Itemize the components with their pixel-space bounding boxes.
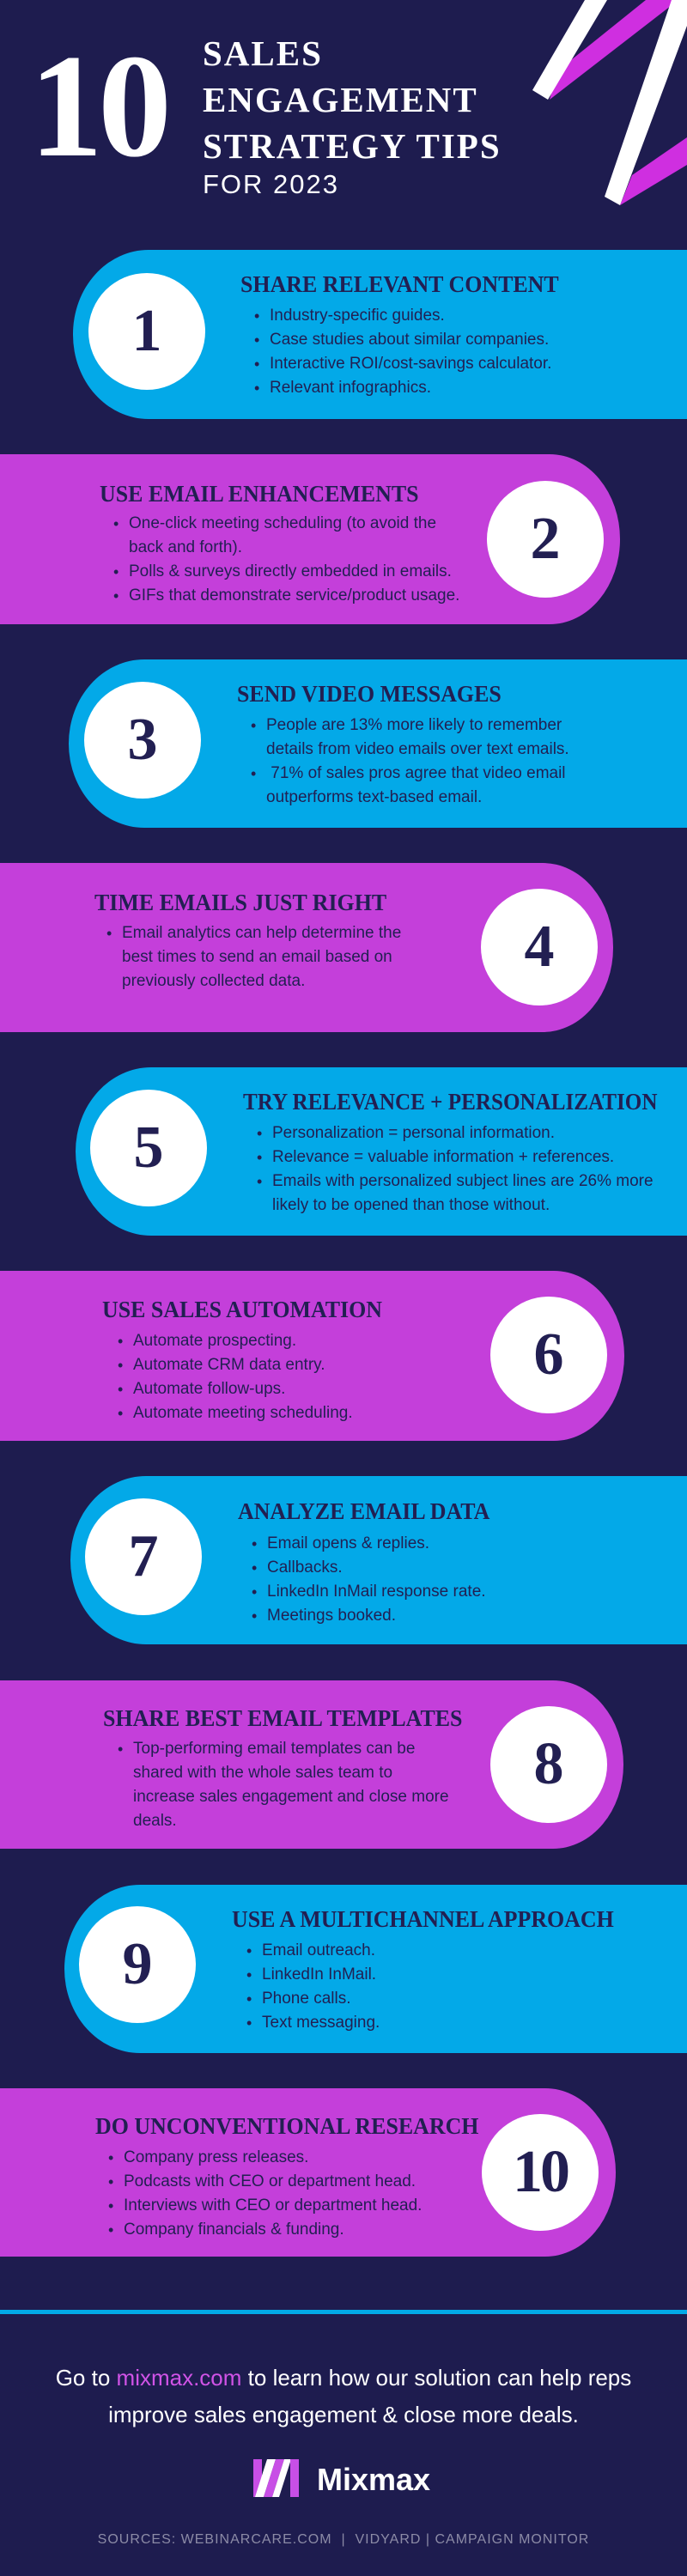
bullets 9: Text messaging. — [262, 2014, 380, 2032]
bullets 3: outperforms text-based email. — [266, 788, 482, 806]
footer call to action: Go to mixmax.com to learn how our solution can help reps — [56, 2365, 631, 2391]
title 8: SHARE BEST EMAIL TEMPLATES — [103, 1705, 462, 1731]
title 7: ANALYZE EMAIL DATA — [238, 1498, 489, 1524]
number circle 9 — [79, 1906, 196, 2023]
title 4: TIME EMAILS JUST RIGHT — [94, 890, 386, 915]
bullets 6: Automate prospecting. — [133, 1332, 296, 1350]
bullets 1: Case studies about similar companies. — [270, 331, 549, 349]
bullets 3: People are 13% more likely to remember — [266, 716, 562, 734]
header: title: ENGAGEMENT — [203, 80, 478, 119]
bullets 8 — [119, 1740, 449, 1830]
number circle 7: 7 — [129, 1523, 158, 1589]
header: big number 10: 10 — [29, 25, 167, 188]
bullets 10: Podcasts with CEO or department head. — [124, 2172, 416, 2190]
bullets 10: Company press releases. — [124, 2148, 308, 2166]
bullets 1: Relevant infographics. — [270, 379, 431, 397]
header: title — [203, 33, 502, 199]
bullets 8: increase sales engagement and close more — [133, 1788, 449, 1806]
number circle 2 — [487, 481, 604, 598]
title 3: SEND VIDEO MESSAGES — [237, 681, 502, 707]
bullets 2: Polls & surveys directly embedded in emails. — [129, 562, 452, 580]
bullets 2: One-click meeting scheduling (to avoid the — [129, 514, 436, 532]
bullets 6: Automate CRM data entry. — [133, 1356, 325, 1374]
header: title: STRATEGY TIPS — [203, 126, 502, 166]
title 2: USE EMAIL ENHANCEMENTS — [100, 481, 419, 507]
number circle 3 — [84, 682, 201, 799]
bullets 8: Top-performing email templates can be — [133, 1740, 415, 1758]
panel: 7 analyze email data — [70, 1476, 687, 1644]
bullets 10 — [108, 2148, 422, 2239]
bullets 2 — [113, 514, 459, 605]
bullets 6 — [119, 1332, 353, 1422]
bullets 9: Email outreach. — [262, 1941, 375, 1959]
bullets 6: Automate meeting scheduling. — [133, 1404, 353, 1422]
number circle 4 — [481, 889, 598, 1005]
icon: mixmax mark — [253, 2459, 299, 2497]
panel: 4 time emails just right — [0, 863, 613, 1032]
number circle 4: 4 — [524, 914, 555, 980]
bullets 5: Emails with personalized subject lines are 26% more — [272, 1172, 654, 1190]
number circle 6 — [490, 1297, 607, 1413]
bullets 8: deals. — [133, 1812, 177, 1830]
number circle 2: 2 — [531, 506, 560, 572]
bullets 7: Meetings booked. — [267, 1607, 396, 1625]
panel: 10 unconventional research — [0, 2088, 616, 2257]
number circle 5: 5 — [134, 1115, 163, 1181]
panel: 1 share relevant content — [73, 250, 687, 419]
header: title: SALES — [203, 33, 323, 73]
bullets 4: Email analytics can help determine the — [122, 924, 401, 942]
bullets 3 — [251, 716, 569, 806]
bullets 4 — [106, 924, 401, 990]
footer call to action — [56, 2365, 631, 2427]
title 5: TRY RELEVANCE + PERSONALIZATION — [243, 1089, 657, 1115]
number circle 10: 10 — [513, 2139, 568, 2205]
panel: 3 send video messages — [69, 659, 687, 828]
bullets 5: Personalization = personal information. — [272, 1124, 555, 1142]
number circle 1 — [88, 273, 205, 390]
bullets 5 — [258, 1124, 654, 1214]
bullets 10: Company financials & funding. — [124, 2221, 344, 2239]
title 1: SHARE RELEVANT CONTENT — [240, 271, 559, 297]
panel: 2 use email enhancements — [0, 454, 620, 624]
number circle 6: 6 — [534, 1321, 563, 1388]
bullets 9: LinkedIn InMail. — [262, 1965, 376, 1984]
number circle 3: 3 — [127, 707, 158, 773]
panel: 6 use sales automation — [0, 1271, 624, 1441]
number circle 8: 8 — [534, 1731, 563, 1797]
footer call to action: improve sales engagement & close more deals. — [108, 2402, 579, 2427]
bullets 7: LinkedIn InMail response rate. — [267, 1583, 486, 1601]
bullets 1 — [254, 307, 551, 397]
decorative stripes — [532, 0, 687, 205]
bullets 3: details from video emails over text emails. — [266, 740, 569, 758]
bullets 2: back and forth). — [129, 538, 242, 556]
bullets 9: Phone calls. — [262, 1990, 351, 2008]
number circle 9: 9 — [122, 1931, 153, 1997]
bullets 4: previously collected data. — [122, 972, 305, 990]
number circle 1: 1 — [132, 298, 161, 364]
bullets 10: Interviews with CEO or department head. — [124, 2196, 422, 2215]
bullets 1: Industry-specific guides. — [270, 307, 445, 325]
bullets 1: Interactive ROI/cost-savings calculator. — [270, 355, 551, 373]
subtitle: for 2023: FOR 2023 — [203, 169, 339, 199]
bullets 7: Callbacks. — [267, 1558, 343, 1577]
panel: 9 multichannel approach — [64, 1885, 687, 2053]
bullets 3: 71% of sales pros agree that video email — [271, 764, 566, 782]
number circle 10 — [482, 2114, 599, 2231]
number circle 5 — [90, 1090, 207, 1206]
title 10: DO UNCONVENTIONAL RESEARCH — [95, 2113, 478, 2139]
bullets 9 — [247, 1941, 380, 2032]
title 6: USE SALES AUTOMATION — [102, 1297, 382, 1322]
bullets 5: likely to be opened than those without. — [272, 1196, 550, 1214]
bullets 8: shared with the whole sales team to — [133, 1764, 392, 1782]
number circle 8 — [490, 1706, 607, 1823]
wordmark: Mixmax — [317, 2462, 430, 2497]
bullets 6: Automate follow-ups. — [133, 1380, 285, 1398]
bullets 2: GIFs that demonstrate service/product usage. — [129, 586, 459, 605]
panel: 5 relevance + personalization — [76, 1067, 687, 1236]
bullets 7: Email opens & replies. — [267, 1534, 429, 1552]
sources: SOURCES: WEBINARCARE.COM | VIDYARD | CAMPAIGN MONITOR — [98, 2532, 589, 2547]
panel: 8 share best email templates — [0, 1680, 623, 1849]
logo: mixmax — [253, 2459, 430, 2497]
number circle 7 — [85, 1498, 202, 1615]
bullets 7 — [252, 1534, 486, 1625]
bullets 5: Relevance = valuable information + references. — [272, 1148, 614, 1166]
title 9: USE A MULTICHANNEL APPROACH — [232, 1906, 614, 1932]
bullets 4: best times to send an email based on — [122, 948, 392, 966]
